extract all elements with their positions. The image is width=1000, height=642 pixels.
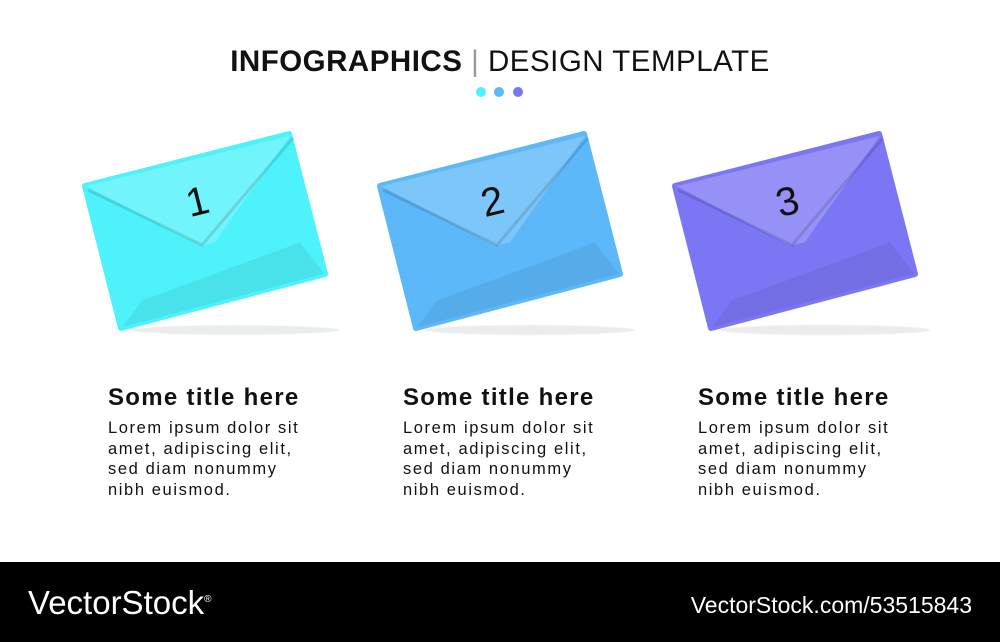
item 2 text: Lorem ipsum dolor sit amet, adipiscing elit, sed diam nonummy nibh euismod. bbox=[403, 419, 594, 498]
envelopes bbox=[82, 131, 930, 336]
item 1 title: Some title here bbox=[108, 384, 300, 411]
envelope 2: 2 bbox=[476, 178, 509, 226]
item 1 text: Lorem ipsum dolor sit amet, adipiscing elit, sed diam nonummy nibh euismod. bbox=[108, 419, 299, 498]
footer bar bbox=[0, 562, 1000, 642]
footer logo: VectorStock® bbox=[28, 584, 211, 621]
envelope 1 bbox=[85, 134, 340, 335]
footer url: VectorStock.com/53515843 bbox=[691, 592, 972, 618]
item 3 title: Some title here bbox=[698, 384, 890, 411]
envelope 3: 3 bbox=[771, 178, 804, 226]
title: INFOGRAPHICS | DESIGN TEMPLATE bbox=[230, 45, 770, 78]
envelope 3 bbox=[675, 134, 930, 335]
envelope 1: 1 bbox=[181, 178, 214, 226]
item 3 text: Lorem ipsum dolor sit amet, adipiscing elit, sed diam nonummy nibh euismod. bbox=[698, 419, 889, 498]
envelope 2 bbox=[380, 134, 635, 335]
title dots bbox=[476, 87, 523, 97]
item 2 title: Some title here bbox=[403, 384, 595, 411]
